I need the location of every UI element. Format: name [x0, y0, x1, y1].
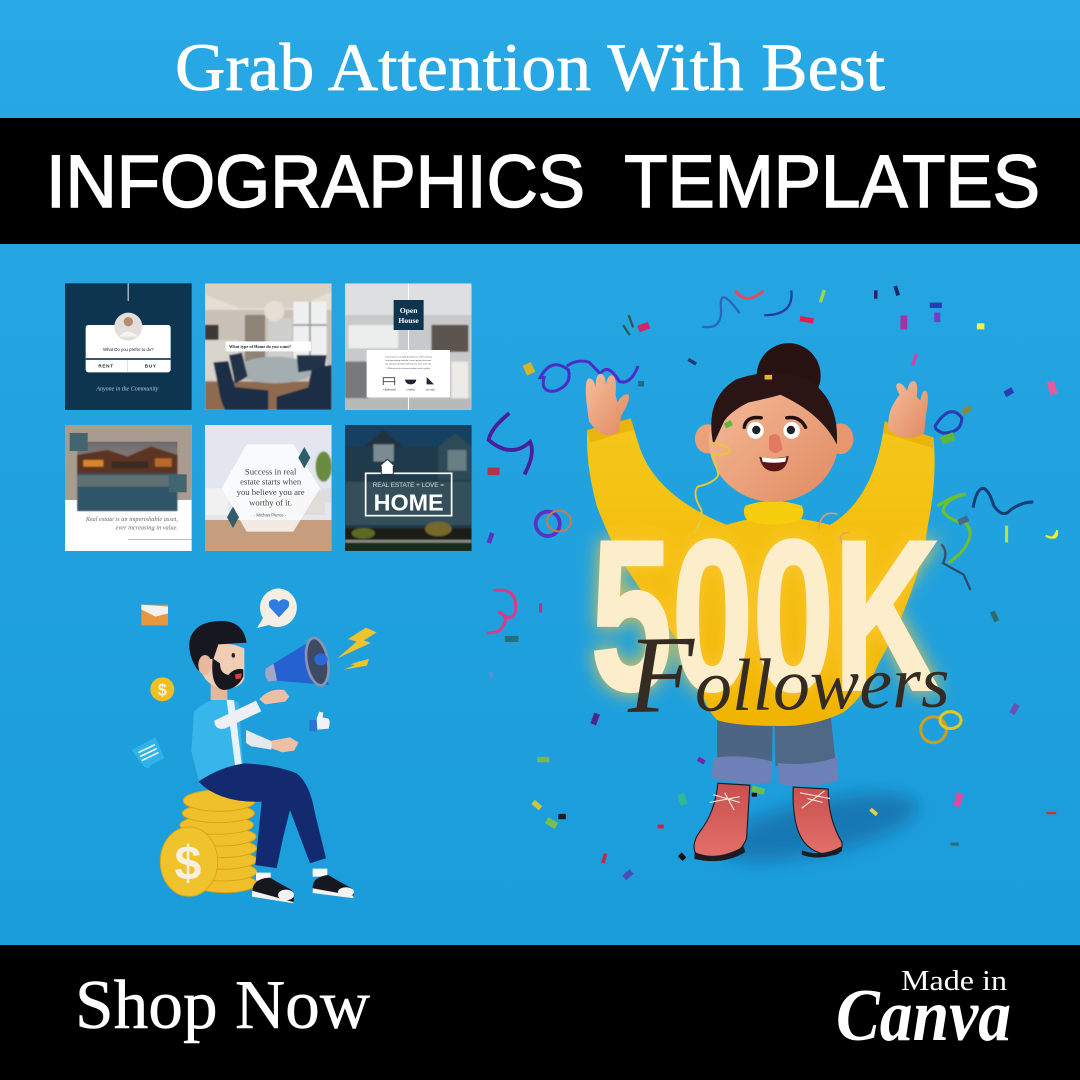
illustration: celebrating character with confetti	[487, 285, 1057, 880]
thumbnail: open house: Lorem ipsum is simply dummy text of the printing	[385, 356, 432, 359]
head	[189, 621, 247, 700]
large dollar coin	[160, 827, 218, 896]
title: Grab Attention With Best: Grab Attention With Best	[175, 29, 885, 105]
thumbnail: dining room search	[205, 283, 332, 410]
thumbnail: imperishable asset: ever increasing in value.	[116, 525, 178, 532]
thumbnail: success quote: worthy of it.	[249, 497, 292, 507]
floor shadow	[714, 780, 924, 875]
badge: Made in Canva: Canva	[836, 975, 1011, 1057]
large dollar coin: $	[175, 836, 202, 890]
heading: Infographics Templates: INFOGRAPHICS TEMPLATES	[46, 140, 1040, 223]
thumbnail: success quote: - Michas Pierce -	[254, 513, 287, 518]
thumbnail: real estate love home: HOME	[374, 489, 444, 515]
footer band	[0, 945, 1080, 1080]
thumbnail: open house: xxx sqft	[425, 388, 435, 392]
confetti pieces	[487, 285, 1057, 880]
icon: dollar coin	[150, 677, 174, 701]
icon: envelope	[141, 605, 168, 625]
call to action: Shop Now: Shop Now	[75, 967, 370, 1044]
thumbnail: open house: the industry standard dummy text ever since the	[385, 362, 432, 365]
thumbnail: imperishable asset	[65, 425, 192, 551]
shirt placket	[227, 700, 242, 767]
far leg shoe	[313, 869, 354, 898]
icon: thumbs up	[309, 712, 330, 731]
panel: template thumbnails grid	[65, 283, 472, 551]
thumbnail: rent or buy: What Do you prefer to do?	[103, 347, 154, 352]
thumbnail: rent or buy: RENT	[98, 364, 114, 369]
icon: message bubble	[131, 737, 165, 769]
thumbnail: success quote: Success in real	[245, 466, 297, 476]
thumbnail: open house: and typesetting industry. Lorem ipsum has been	[385, 359, 432, 362]
near leg shoe	[252, 873, 294, 903]
thumbnail: success quote: you believe you are	[237, 487, 305, 497]
boots	[694, 783, 842, 861]
shirt	[191, 698, 243, 784]
thumbnail: open house	[345, 283, 472, 410]
pants	[198, 763, 326, 868]
thumbnail: open house: 1500s when an unknown printer took a galley	[387, 367, 431, 370]
thumbnail: rent or buy: Anyone in the Community	[95, 386, 159, 392]
shorts	[712, 716, 838, 786]
sweater	[587, 419, 935, 726]
head	[694, 343, 853, 533]
thumbnail: open house: x Bathroom	[383, 388, 397, 392]
coin stack	[180, 790, 257, 893]
thumbnail: success quote: estate starts when	[240, 477, 302, 487]
thumbnail: open house: House	[398, 316, 419, 325]
script label: Followers: Followers	[625, 608, 950, 736]
thumbnail: dining room search: What type of Home do you want?	[229, 344, 291, 349]
icon: heart speech bubble	[257, 588, 297, 628]
thumbnail: rent or buy	[65, 283, 192, 410]
arms	[214, 690, 299, 752]
sweater cuffs	[587, 419, 934, 448]
illustration: man with megaphone on coins	[131, 588, 377, 903]
thumbnail: success quote	[205, 425, 332, 551]
icon: lightning bolts	[337, 628, 377, 670]
icon: dollar coin: $	[158, 681, 168, 700]
thumbnail: rent or buy: BUY	[145, 364, 157, 369]
thumbnail: open house: x baths	[406, 388, 416, 392]
thumbnail: imperishable asset: Real estate is an imperishable asset,	[85, 516, 178, 523]
right hand	[888, 381, 928, 438]
thumbnail: real estate love home: REAL ESTATE + LOVE =	[373, 482, 444, 489]
heading band	[0, 118, 1080, 244]
thumbnail: real estate love home	[345, 425, 472, 551]
megaphone	[265, 636, 332, 687]
left hand	[586, 374, 629, 435]
thumbnail: open house: Open	[400, 306, 418, 315]
collar	[744, 501, 803, 525]
badge: Made in Canva: Made in	[901, 965, 1008, 997]
